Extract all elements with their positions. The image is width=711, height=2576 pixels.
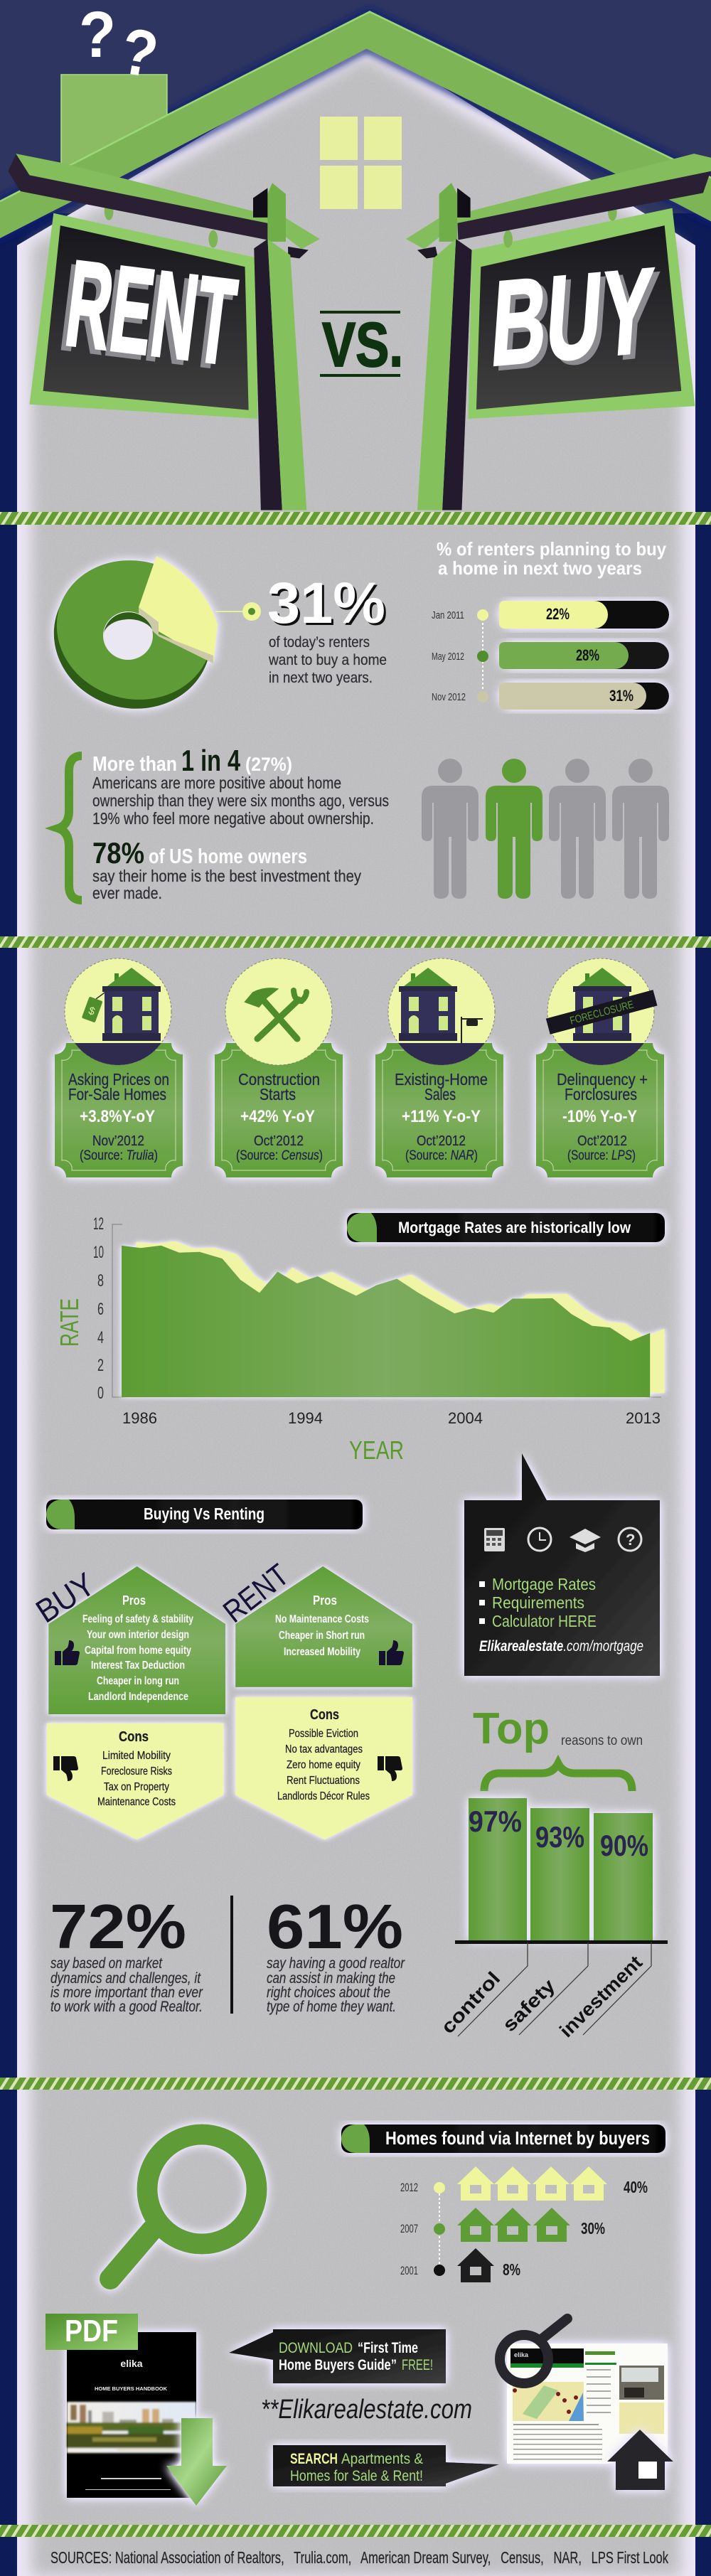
panel: asking prices card: Asking Prices on [68,1070,169,1089]
panel: buy pros and cons [29,1565,225,1839]
bar: May 2012: 28% [576,646,599,664]
panel: asking prices card [55,958,183,1177]
row: 2001: 8% [503,2260,520,2279]
icon: magnifying glass [110,2134,257,2279]
stat: 61%: can assist in making the [267,1970,395,1987]
handbook title text [95,2358,168,2392]
rent cons list: No tax advantages [285,1743,363,1755]
panel: asking prices card: (Source: Trulia) [80,1148,158,1163]
buy pros list: Feeling of safety & stability [82,1613,193,1625]
leader lines [458,1942,651,2036]
y axis labels [93,1214,104,1403]
panel: construction starts card: (Source: Census) [236,1148,323,1163]
handbook title text: elika [120,2358,143,2369]
panel: asking prices card: For-Sale Homes [68,1085,166,1103]
screenshot header bar: elika [514,2351,529,2358]
label: RENT: RENT [217,1557,296,1630]
panel: existing-home sales card: Sales [424,1085,456,1103]
y axis labels: 8 [97,1271,104,1290]
rent cons list: Cons [310,1707,339,1723]
y axis labels: 2 [97,1356,104,1375]
bar: Nov 2012: Nov 2012 [432,691,466,703]
heading pill: buying vs renting: Buying Vs Renting [144,1505,264,1523]
screenshot header bar [510,2348,584,2368]
people icons: 1 in 4 [422,759,669,899]
question marks above chimney: ? [116,14,163,92]
heading pill: buying vs renting [46,1500,363,1529]
bar: Jan 2011: Jan 2011 [432,609,464,621]
icon: price tag: $ [87,1005,97,1018]
panel: existing-home sales card: +11% Y-o-Y [402,1107,481,1126]
rent cons list [277,1707,370,1802]
text: 78% of US home owners: say their home is the best investment they [92,867,361,885]
heading pill: homes found via internet: Homes found via Internet by buyers [385,2127,650,2149]
icon: thumbs down [378,1756,402,1781]
panel: existing-home sales card [375,958,503,1177]
chart axes [112,1224,661,1397]
green curly brace [58,756,82,900]
buy cons list: Maintenance Costs [97,1796,176,1808]
panel: delinquency and foreclosures card [536,958,664,1177]
text: 78% of US home owners: 78% [92,836,144,870]
callout: download guide: Home Buyers Guide” [279,2357,397,2373]
bar: Jan 2011: 22% [546,605,570,623]
panel: construction starts card: Oct’2012 [254,1133,304,1149]
handbook skyline photo [67,2402,196,2453]
panel: delinquency and foreclosures card: (Source: LPS) [567,1148,636,1163]
text: 78% of US home owners: of US home owners [149,845,307,868]
stat 31% description: in next two years. [269,670,373,686]
x axis labels: 1986 [122,1409,157,1427]
series areas [122,1241,665,1397]
rent pros list: No Maintenance Costs [275,1613,369,1625]
bar chart: top reasons [437,1798,668,2041]
rent cons list: Zero home equity [287,1759,360,1771]
bar chart: top reasons: 90% [600,1829,648,1862]
callout: search listings: Apartments & [341,2451,423,2467]
x axis labels: 2004 [448,1409,483,1427]
panel: existing-home sales card: Oct’2012 [417,1133,466,1149]
panel: existing-home sales card: (Source: NAR) [405,1148,478,1163]
x axis labels: 1994 [288,1409,323,1427]
bar: May 2012: May 2012 [432,651,464,663]
screenshot map [513,2382,584,2421]
buy pros list: Capital from home equity [85,1645,191,1657]
heading: renters planning to buy [437,538,666,579]
panel: existing-home sales card: Existing-Home [395,1070,488,1089]
panel: construction starts card: Starts [260,1085,296,1103]
row: 2001: 2001 [400,2264,418,2277]
text: more than 1 in 4: (27%) [245,754,292,775]
3D donut chart: 31% [38,543,228,726]
mortgage link list: Calculator HERE [492,1612,597,1630]
panel: delinquency and foreclosures card: Delinquency + [557,1070,648,1089]
buy pros list: Your own interior design [87,1629,189,1641]
panel: delinquency and foreclosures card: Forclosures [565,1085,637,1103]
chimney [61,75,167,174]
label: BUY: BUY [29,1565,101,1630]
big stat 31%: 31% [269,573,387,638]
buy cons list: Limited Mobility [102,1750,171,1762]
row: 2012 [400,2166,648,2201]
row: 2001 [400,2248,520,2282]
row: 2007 [400,2208,605,2242]
heading pill: mortgage rates: Mortgage Rates are historically low [398,1219,631,1236]
bar labels: control [437,1967,504,2038]
PDF badge [46,2314,138,2350]
buy pros list: Pros [122,1593,146,1608]
bar chart: top reasons: 97% [469,1805,522,1838]
big stat 31%: 31% [267,571,385,636]
buy cons list: Foreclosure Risks [101,1765,172,1778]
buy cons list: Cons [119,1729,149,1745]
foreclosure banner: FORECLOSURE [569,998,635,1027]
icon: thumbs up [55,1640,80,1665]
icon: price tag [82,985,109,1023]
axis title: YEAR: YEAR [349,1436,404,1465]
icon: sold sign post [461,1017,483,1043]
row: 2007: 30% [581,2219,605,2238]
icon: download arrow [166,2418,227,2506]
bar chart: top reasons: 93% [535,1820,584,1854]
y axis labels: 4 [97,1328,104,1347]
screenshot small map [619,2403,664,2434]
bar: May 2012 [432,642,669,669]
bar labels: investment [555,1952,646,2041]
icon: clock [528,1528,551,1551]
buy cons list [97,1729,176,1808]
buy pros list: Interest Tax Deduction [91,1660,185,1672]
panel: asking prices card: +3.8%Y-oY [80,1107,155,1126]
panel: rent pros and cons [217,1557,412,1839]
heading: top reasons to own [473,1704,643,1753]
title: RENT [54,235,242,395]
bar: Nov 2012 [432,683,669,710]
text: more than 1 in 4: 19% who feel more negative about ownership. [92,809,374,828]
text: more than 1 in 4 [92,744,389,828]
heading pill: mortgage rates [347,1213,665,1242]
callout: download guide: DOWNLOAD [279,2340,353,2356]
screenshot listing table [513,2424,602,2460]
row: 2007: 2007 [400,2222,418,2235]
stat: 61% [267,1891,405,2015]
icon: question mark [619,1528,641,1551]
roof halo [0,12,711,238]
rent pros list: Pros [313,1593,337,1608]
header illustration: house and sign posts [0,12,711,510]
text: more than 1 in 4: More than [92,753,177,776]
icon: thumbs up [379,1640,404,1665]
handbook cover [67,2332,196,2498]
mortgage url: Elikarealestate.com/mortgage [479,1638,643,1655]
buy pros list [82,1593,193,1703]
rent cons list: Possible Eviction [289,1728,358,1740]
icon: thumbs down [53,1756,78,1781]
panel: construction starts card: +42% Y-oY [240,1107,315,1126]
question marks above chimney: ? [79,0,116,71]
left sign: rent [8,154,320,510]
callout: download guide [229,2329,446,2383]
mortgage link list [479,1575,597,1630]
row: 2012: 2012 [400,2181,418,2194]
foreclosure banner [546,990,657,1035]
area chart: mortgage rates [55,1214,665,1465]
callout: download guide: FREE! [402,2357,433,2373]
icon: black house [607,2430,673,2490]
icon: black magnifier [500,2319,567,2383]
title: RENT: RENT [54,239,237,395]
callout: search listings: Homes for Sale & Rent! [290,2468,423,2484]
stat: 61%: 61% [267,1891,403,1962]
buy pros list: Landlord Independence [88,1691,188,1703]
rent cons list: Landlords Décor Rules [277,1790,370,1802]
bar labels [437,1952,646,2041]
x axis labels: 2013 [626,1409,661,1427]
stat: 72%: is more important than ever [50,1984,203,2001]
panel: construction starts card [215,958,343,1177]
callout: search listings [273,2445,499,2486]
website url: **Elikarealestate.com [261,2395,472,2425]
question marks above chimney [79,0,163,92]
rent pros list: Increased Mobility [284,1646,360,1658]
icon: calculator [484,1528,505,1551]
rent pros list [275,1593,369,1658]
rent pros list: Cheaper in Short run [279,1630,365,1642]
bar: Jan 2011 [432,601,669,629]
text: 78% of US home owners [92,836,361,902]
text: 78% of US home owners: ever made. [92,884,162,902]
roof [0,12,711,238]
bar labels: safety [498,1975,560,2036]
horizontal curly brace [484,1763,632,1791]
icon: hammer and wrench [245,988,306,1039]
pictogram chart: homes found online [400,2166,648,2282]
panel: asking prices card: Nov’2012 [92,1133,144,1149]
title: VS.: VS. [322,309,403,380]
buy cons list: Tax on Property [104,1781,169,1793]
heading: top reasons to own: reasons to own [561,1733,643,1748]
donut callout connector [215,602,261,621]
callout: download guide: “First Time [358,2340,418,2356]
stat: 72%: say based on market [50,1955,163,1972]
panel: delinquency and foreclosures card: Oct’2012 [577,1133,627,1149]
text: more than 1 in 4: Americans are more positive about home [92,774,341,792]
stat: 72%: dynamics and challenges, it [50,1970,201,1987]
attic window [320,117,402,209]
heading: top reasons to own: Top [473,1704,550,1753]
handbook title text: HOME BUYERS HANDBOOK [95,2385,168,2392]
stat: 72%: 72% [50,1891,186,1962]
text: more than 1 in 4: 1 in 4 [181,744,240,777]
callout: search listings: SEARCH [290,2451,338,2467]
screenshot details column [585,2351,616,2413]
mortgage link list: Requirements [492,1593,584,1612]
panel: delinquency and foreclosures card: -10% Y-o-Y [562,1107,637,1126]
icon: graduation cap [570,1529,601,1552]
text: more than 1 in 4: ownership than they were six months ago, versus [92,791,389,810]
stat 31% description: want to buy a home [268,652,387,668]
heading: renters planning to buy: % of renters planning to buy [437,538,666,560]
bar: Nov 2012: 31% [609,687,634,705]
stat: 61%: type of home they want. [267,1999,396,2015]
panel: mortgage tools callout [464,1453,660,1676]
stat: 72% [50,1891,203,2015]
y axis labels: 0 [97,1384,104,1403]
rent cons list: Rent Fluctuations [287,1775,360,1787]
timeline bar chart [432,601,669,710]
heading pill: homes found via internet [341,2125,665,2153]
panel: construction starts card: Construction [238,1070,320,1089]
y axis labels: 10 [93,1243,104,1262]
stat: 61%: say having a good realtor [267,1955,405,1972]
stat: 61%: right choices about the [267,1984,390,2001]
screenshot room photo [619,2366,664,2400]
row: 2012: 40% [624,2178,648,2196]
website screenshot [507,2343,668,2464]
stat: 72%: to work with a good Realtor. [50,1999,203,2015]
right sign: buy [406,154,711,510]
stat 31% description [268,634,387,686]
PDF badge: PDF [65,2314,118,2348]
small footer lines [85,2478,171,2490]
mortgage link list: Mortgage Rates [492,1575,596,1593]
axis title: RATE: RATE [55,1298,84,1347]
title: RENT: RENT [59,235,242,390]
x axis labels [122,1409,661,1427]
heading: renters planning to buy: a home in next two years [438,557,642,579]
y axis labels: 12 [93,1214,104,1234]
striped section dividers [0,512,711,2537]
stat 31% description: of today’s renters [269,634,370,651]
buy pros list: Cheaper in long run [97,1675,179,1687]
icon: question mark: ? [626,1531,635,1549]
y axis labels: 6 [97,1300,104,1319]
